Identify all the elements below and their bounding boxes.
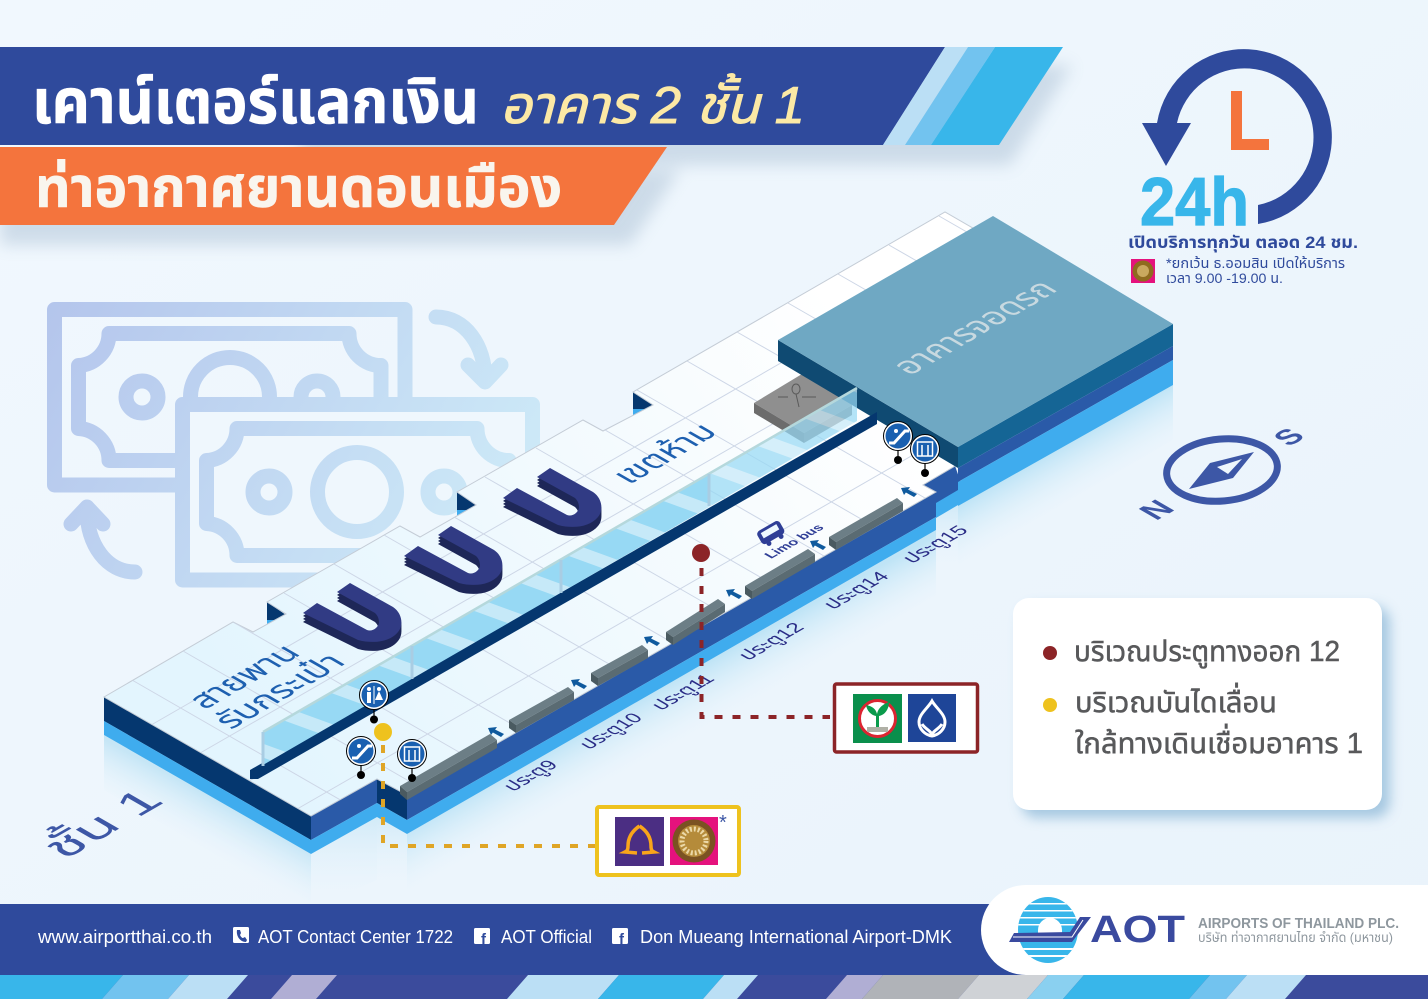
curb barriers xyxy=(400,498,903,800)
floor plan reflections xyxy=(104,385,1173,910)
logo: SCB xyxy=(615,817,664,866)
gate labels xyxy=(499,523,974,795)
legend card: บริเวณบันไดเลื่อน xyxy=(1075,682,1277,719)
pin: lift xyxy=(398,740,426,782)
footer band: www.airportthai.co.th xyxy=(37,927,212,947)
gate labels: ประตู15 xyxy=(898,523,974,567)
gate labels: ประตู12 xyxy=(734,620,810,664)
header shadows xyxy=(0,65,1072,245)
pin: lift north xyxy=(910,434,940,477)
icon: phone xyxy=(233,927,249,943)
U-shaped counter 3 xyxy=(503,468,601,536)
GSB exception note: *ยกเว้น ธ.ออมสิน เปิดให้บริการ xyxy=(1166,255,1345,271)
pin: escalator north xyxy=(884,422,912,464)
logo: KBank xyxy=(853,694,902,743)
label: parking building: อาคารจอดรถ xyxy=(884,275,1066,380)
opening hours text: เปิดบริการทุกวัน ตลอด 24 ชม. xyxy=(1128,233,1358,253)
GSB exception note xyxy=(1131,255,1345,286)
logo panel: AIRPORTS OF THAILAND PLC. xyxy=(1198,915,1399,932)
GSB exception note: เวลา 9.00 -19.00 น. xyxy=(1166,270,1283,286)
subtitle banner xyxy=(0,147,667,225)
U-shaped counter 2 xyxy=(404,526,502,594)
limo bus label: Limo bus xyxy=(761,522,827,561)
logo panel xyxy=(981,885,1428,975)
legend card: บริเวณประตูทางออก 12 xyxy=(1074,636,1340,669)
title banner xyxy=(0,47,1063,145)
callout: SCB and GSB xyxy=(597,807,739,875)
U-shaped counter 1 xyxy=(303,583,401,651)
gray block: food court xyxy=(754,374,852,443)
icon: banknotes and exchange arrows xyxy=(54,310,532,580)
gate labels: ประตู10 xyxy=(575,710,649,753)
icon: facebook: f xyxy=(481,931,487,948)
footer band xyxy=(0,904,1428,975)
corridor slot xyxy=(250,412,877,779)
footer band: AOT Official xyxy=(501,927,592,947)
icon: facebook xyxy=(612,928,628,948)
gate labels: ประตู9 xyxy=(499,757,564,795)
floor label: baggage claim: รับกระเป๋า xyxy=(205,648,353,734)
floor label: baggage claim xyxy=(179,639,353,734)
direction arrows xyxy=(488,487,917,737)
logo: Bangkok Bank xyxy=(908,694,956,742)
gate labels: ประตู14 xyxy=(819,569,895,613)
footer colour strip xyxy=(0,975,1428,999)
AOT emblem xyxy=(1009,897,1091,963)
floor label: baggage claim: สายพาน xyxy=(179,639,308,714)
legend card: ใกล้ทางเดินเชื่อมอาคาร 1 xyxy=(1075,723,1363,760)
gate labels: ประตู11 xyxy=(647,671,721,714)
footer band: Don Mueang International Airport-DMK xyxy=(640,927,952,947)
floor grid xyxy=(133,216,966,808)
compass xyxy=(1131,424,1312,525)
asterisk: * xyxy=(719,812,727,834)
legend card xyxy=(1013,598,1390,818)
heading: building and floor: อาคาร 2 ชั้น 1 xyxy=(500,73,805,135)
icon: facebook xyxy=(474,928,490,948)
logo panel: บริษัท ท่าอากาศยานไทย จำกัด (มหาชน) xyxy=(1198,930,1393,945)
callout: KBank and Bangkok Bank xyxy=(834,684,978,752)
floor label: floor 1: ชั้น 1 xyxy=(28,781,174,865)
subtitle banner: ท่าอากาศยานดอนเมือง xyxy=(35,156,562,219)
icon: 24 hour clock: 24h xyxy=(1140,164,1249,240)
icon: facebook: f xyxy=(619,931,625,948)
glass wall xyxy=(263,388,857,766)
compass: N xyxy=(1131,495,1182,525)
floor surface xyxy=(104,212,1000,816)
logo: Government Savings Bank xyxy=(670,817,718,865)
floor front walls xyxy=(104,466,960,854)
yellow location marker with dashed leader xyxy=(374,723,595,846)
red location marker with dashed leader xyxy=(692,544,830,717)
notch triangles xyxy=(267,392,653,630)
pin: escalator xyxy=(346,736,376,779)
footer band: AOT Contact Center 1722 xyxy=(258,927,453,947)
compass: S xyxy=(1266,424,1312,451)
pin: restroom xyxy=(360,680,388,724)
AOT wordmark: AOT xyxy=(1090,909,1185,951)
parking building xyxy=(778,216,1173,506)
heading: exchange counter: เคาน์เตอร์แลกเงิน xyxy=(32,68,479,137)
icon: 24 hour clock xyxy=(1140,49,1332,240)
floor label: restricted area: เขตห้าม xyxy=(603,418,725,489)
